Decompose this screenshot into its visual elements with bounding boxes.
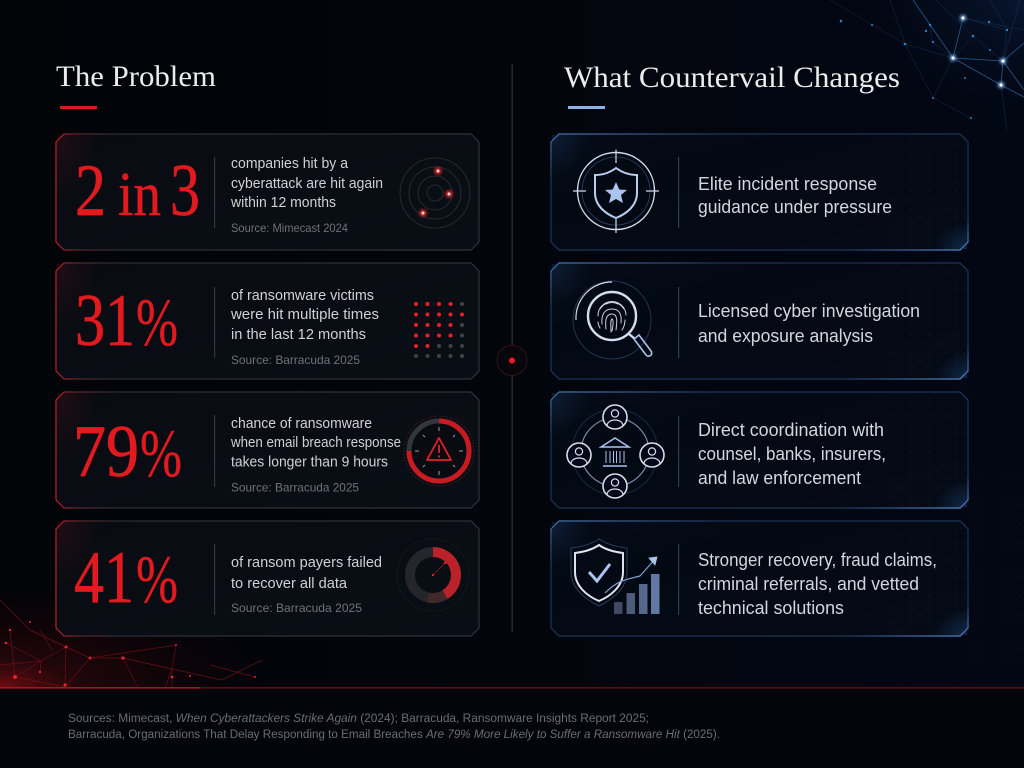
text: benefit: Elite incident response bbox=[698, 174, 877, 194]
stat: 79%: % bbox=[140, 415, 182, 491]
heading: The Problem: The Problem bbox=[56, 60, 216, 93]
footer sources: Sources: Mimecast, When Cyberattackers Strike Again (2024); Barracuda, Ransomware Insights Report 2025; bbox=[68, 713, 649, 725]
text: benefit: Direct coordination with bbox=[698, 420, 884, 440]
text: benefit bbox=[698, 174, 892, 217]
text: description: in the last 12 months bbox=[231, 327, 366, 343]
text: description: cyberattack are hit again bbox=[231, 176, 383, 192]
stat: 41%: 41 bbox=[74, 537, 134, 619]
stat: 41%: % bbox=[136, 541, 178, 617]
text: description: Source: Barracuda 2025 bbox=[231, 353, 360, 367]
panel: recovery bbox=[551, 521, 968, 636]
text: description: Source: Barracuda 2025 bbox=[231, 601, 362, 615]
text: description bbox=[230, 288, 379, 367]
text: benefit: counsel, banks, insurers, bbox=[698, 444, 886, 464]
network: top right bbox=[830, 0, 1024, 130]
text: description: companies hit by a bbox=[231, 156, 349, 172]
text: description: takes longer than 9 hours bbox=[231, 454, 388, 470]
icon: shield check with growth bars bbox=[571, 539, 660, 614]
stat: 2 in 3: in bbox=[118, 161, 161, 229]
stat: 31%: 31 bbox=[75, 280, 135, 362]
text: description: of ransomware victims bbox=[231, 288, 374, 304]
text: description: were hit multiple times bbox=[230, 307, 379, 323]
stat: 31%: % bbox=[136, 284, 178, 360]
text: benefit bbox=[698, 550, 937, 618]
icon: fingerprint magnifier bbox=[573, 281, 652, 359]
network: bottom left bbox=[0, 600, 262, 688]
panel: 2 in 3 bbox=[56, 134, 479, 250]
text: benefit: criminal referrals, and vetted bbox=[698, 574, 919, 594]
text: description: when email breach response bbox=[230, 435, 401, 451]
icon: radar bbox=[400, 158, 470, 228]
text: benefit: Licensed cyber investigation bbox=[698, 301, 920, 321]
panel: incident response bbox=[551, 134, 968, 250]
stat: 2 in 3 bbox=[75, 150, 200, 232]
icon: donut chart bbox=[397, 539, 469, 611]
stat: 2 in 3: 2 bbox=[75, 150, 106, 232]
text: description: of ransom payers failed bbox=[231, 555, 382, 571]
center divider bbox=[497, 64, 527, 632]
panel: 41% bbox=[56, 521, 479, 636]
text: benefit bbox=[698, 420, 886, 488]
text: description: to recover all data bbox=[231, 576, 348, 592]
text: benefit: guidance under pressure bbox=[698, 197, 892, 217]
text: description: chance of ransomware bbox=[231, 416, 372, 432]
icon: dot grid bbox=[414, 302, 464, 358]
text: benefit: and law enforcement bbox=[698, 468, 861, 488]
text: description bbox=[231, 555, 382, 615]
text: description: Source: Barracuda 2025 bbox=[231, 480, 359, 494]
heading: What Countervail Changes bbox=[564, 61, 900, 109]
panel: 31% bbox=[56, 263, 479, 379]
text: benefit: Stronger recovery, fraud claims, bbox=[698, 550, 937, 570]
footer band bbox=[0, 687, 1024, 768]
icon: timer alert bbox=[404, 416, 474, 486]
stat: 79%: 79 bbox=[73, 411, 139, 493]
icon: bank and people network bbox=[567, 405, 664, 498]
text: description bbox=[230, 416, 401, 494]
heading: What Countervail Changes: What Countervail Changes bbox=[564, 61, 900, 94]
footer sources bbox=[68, 713, 720, 741]
text: description bbox=[230, 156, 383, 235]
stat: 79% bbox=[73, 411, 182, 493]
text: description: within 12 months bbox=[230, 195, 336, 211]
panel: 79% bbox=[56, 392, 479, 508]
heading: The Problem bbox=[56, 60, 216, 109]
text: benefit: technical solutions bbox=[698, 598, 844, 618]
text: benefit bbox=[698, 301, 920, 346]
stat: 2 in 3: 3 bbox=[170, 150, 200, 232]
panel: coordination bbox=[551, 392, 968, 508]
text: benefit: and exposure analysis bbox=[698, 326, 873, 346]
panel: investigation bbox=[551, 263, 968, 379]
footer sources: Barracuda, Organizations That Delay Responding to Email Breaches Are 79% More Likely to Suffer a Ransomware Hit (2025). bbox=[68, 729, 720, 741]
icon: shield with star bbox=[573, 150, 659, 233]
text: description: Source: Mimecast 2024 bbox=[231, 221, 348, 235]
